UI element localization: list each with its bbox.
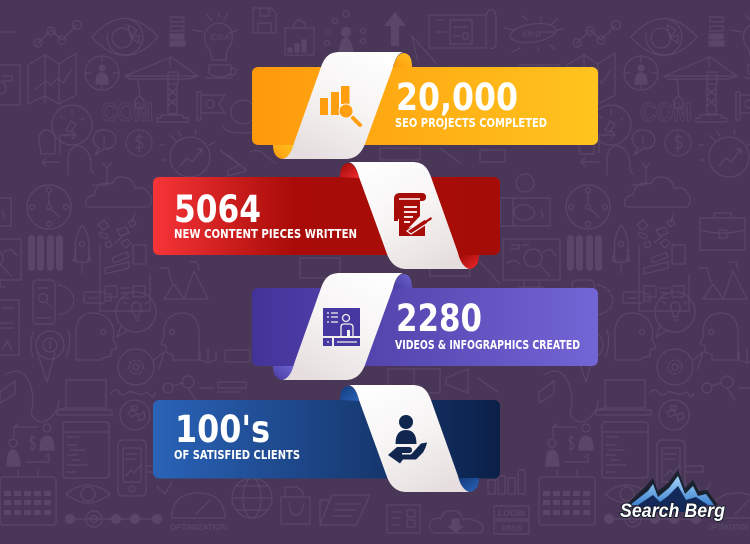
background with doodle pattern: idea [522,29,541,40]
logo: Search Berg: Search Berg [620,501,725,522]
number: 5064: 5064 [174,188,261,231]
label: new content pieces written: NEW CONTENT PIECES WRITTEN [174,227,357,241]
background with doodle pattern: COM [101,97,153,127]
background with doodle pattern: OPTIMIZATION [170,523,227,532]
icon: hand holding person [388,415,427,464]
label: of satisfied clients: OF SATISFIED CLIENTS [174,448,300,462]
number: 20,000: 20,000 [396,76,518,119]
ribbon: yellow [273,52,412,159]
background with doodle pattern: LOGIN [498,509,525,518]
label: videos and infographics created: VIDEOS & INFOGRAPHICS CREATED [395,338,580,352]
panel: videos and infographics [252,273,598,380]
icon: bar chart with magnifier [320,86,360,125]
ribbon: blue [340,385,479,492]
ribbon: red [340,162,479,269]
panel: satisfied clients [153,385,500,492]
icon: notebook and pen [394,193,432,236]
background with doodle pattern: IDEA [210,33,231,42]
background with doodle pattern: COM [640,97,692,127]
background with doodle pattern: PASS [502,524,523,533]
icon: presentation screen [323,308,360,346]
number: 100's: 100's [175,408,270,451]
logo: Search Berg [620,470,725,522]
number: 2280: 2280 [396,297,482,340]
panel: content pieces [153,162,500,269]
ribbon: purple [273,273,412,380]
panel: SEO projects [252,52,598,159]
label: SEO projects completed: SEO PROJECTS COMPLETED [395,116,547,130]
